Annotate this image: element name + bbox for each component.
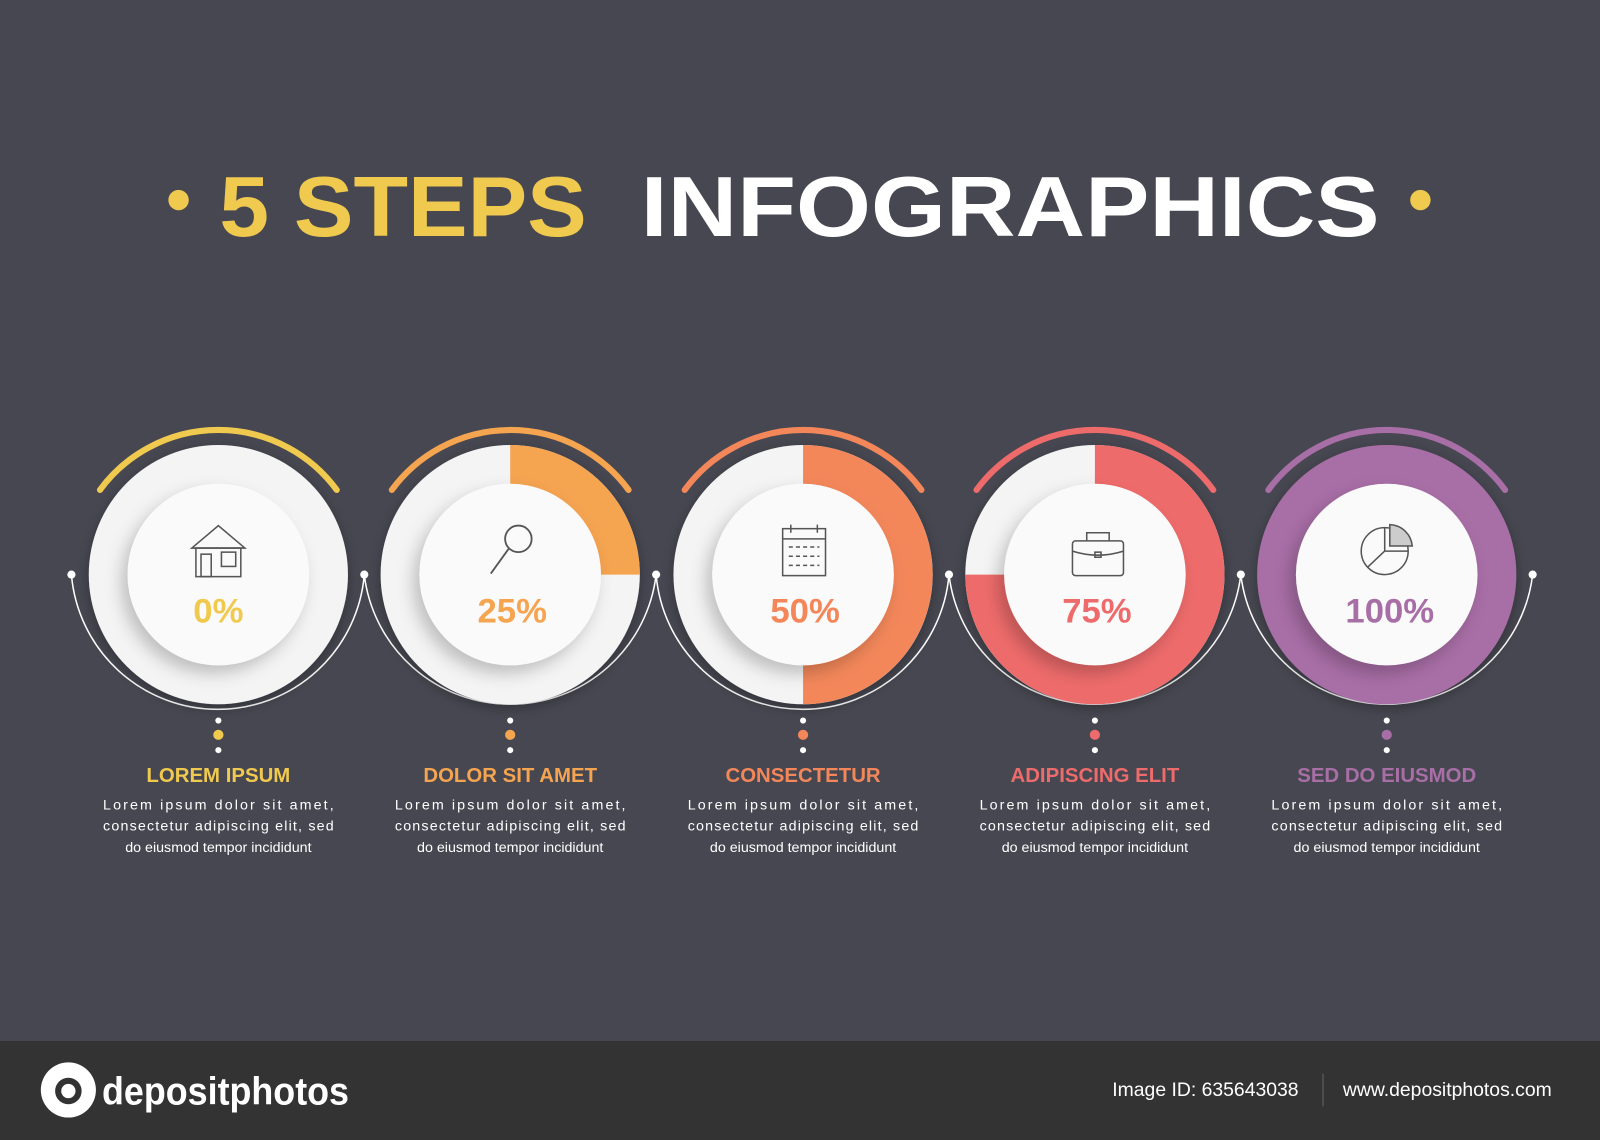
step 1: 0% [193, 593, 243, 631]
footer bar: depositphotos [102, 1070, 349, 1113]
icon: camera logo [41, 1062, 96, 1118]
step 2: consectetur adipiscing elit, sed [395, 819, 626, 835]
icon: magnifier [491, 526, 532, 574]
step 5: consectetur adipiscing elit, sed [1271, 819, 1502, 835]
step 1: LOREM IPSUM [146, 765, 290, 787]
icon: calendar [783, 525, 826, 576]
step 4: 75% [1062, 593, 1132, 631]
title: INFOGRAPHICS [641, 159, 1380, 255]
step 3: Lorem ipsum dolor sit amet, [688, 797, 918, 813]
icon: briefcase [1072, 533, 1123, 576]
icon: pie chart [1361, 525, 1412, 575]
title [168, 159, 1431, 255]
title: 5 STEPS [219, 159, 587, 255]
step 5: Lorem ipsum dolor sit amet, [1271, 797, 1502, 813]
step 2: do eiusmod tempor incididunt [417, 840, 603, 856]
footer bar: Image ID: 635643038 [1112, 1079, 1299, 1101]
step 4: do eiusmod tempor incididunt [1002, 840, 1188, 856]
step 4: consectetur adipiscing elit, sed [980, 819, 1210, 835]
step 4: ADIPISCING ELIT [1010, 765, 1180, 787]
step 4: Lorem ipsum dolor sit amet, [980, 797, 1210, 813]
step 4 [965, 430, 1224, 856]
step 1: Lorem ipsum dolor sit amet, [103, 797, 334, 813]
step 1: do eiusmod tempor incididunt [125, 840, 312, 856]
step 1 [89, 430, 348, 856]
step 5: 100% [1345, 593, 1434, 631]
step 5 [1257, 430, 1516, 856]
step 3: 50% [770, 593, 840, 631]
step 2 [381, 430, 640, 856]
step 2: 25% [478, 593, 547, 631]
footer bar [0, 1041, 1600, 1140]
connector line [67, 571, 1537, 709]
step 2: DOLOR SIT AMET [423, 765, 598, 787]
step 5: do eiusmod tempor incididunt [1294, 840, 1480, 856]
step 3: do eiusmod tempor incididunt [710, 840, 896, 856]
footer bar: www.depositphotos.com [1342, 1079, 1552, 1101]
icon: house [192, 526, 245, 577]
step 3 [673, 430, 933, 856]
step 3: CONSECTETUR [725, 765, 881, 787]
step 1: consectetur adipiscing elit, sed [103, 819, 334, 835]
step 2: Lorem ipsum dolor sit amet, [395, 797, 626, 813]
step 5: SED DO EIUSMOD [1297, 765, 1476, 787]
step 3: consectetur adipiscing elit, sed [688, 819, 918, 835]
